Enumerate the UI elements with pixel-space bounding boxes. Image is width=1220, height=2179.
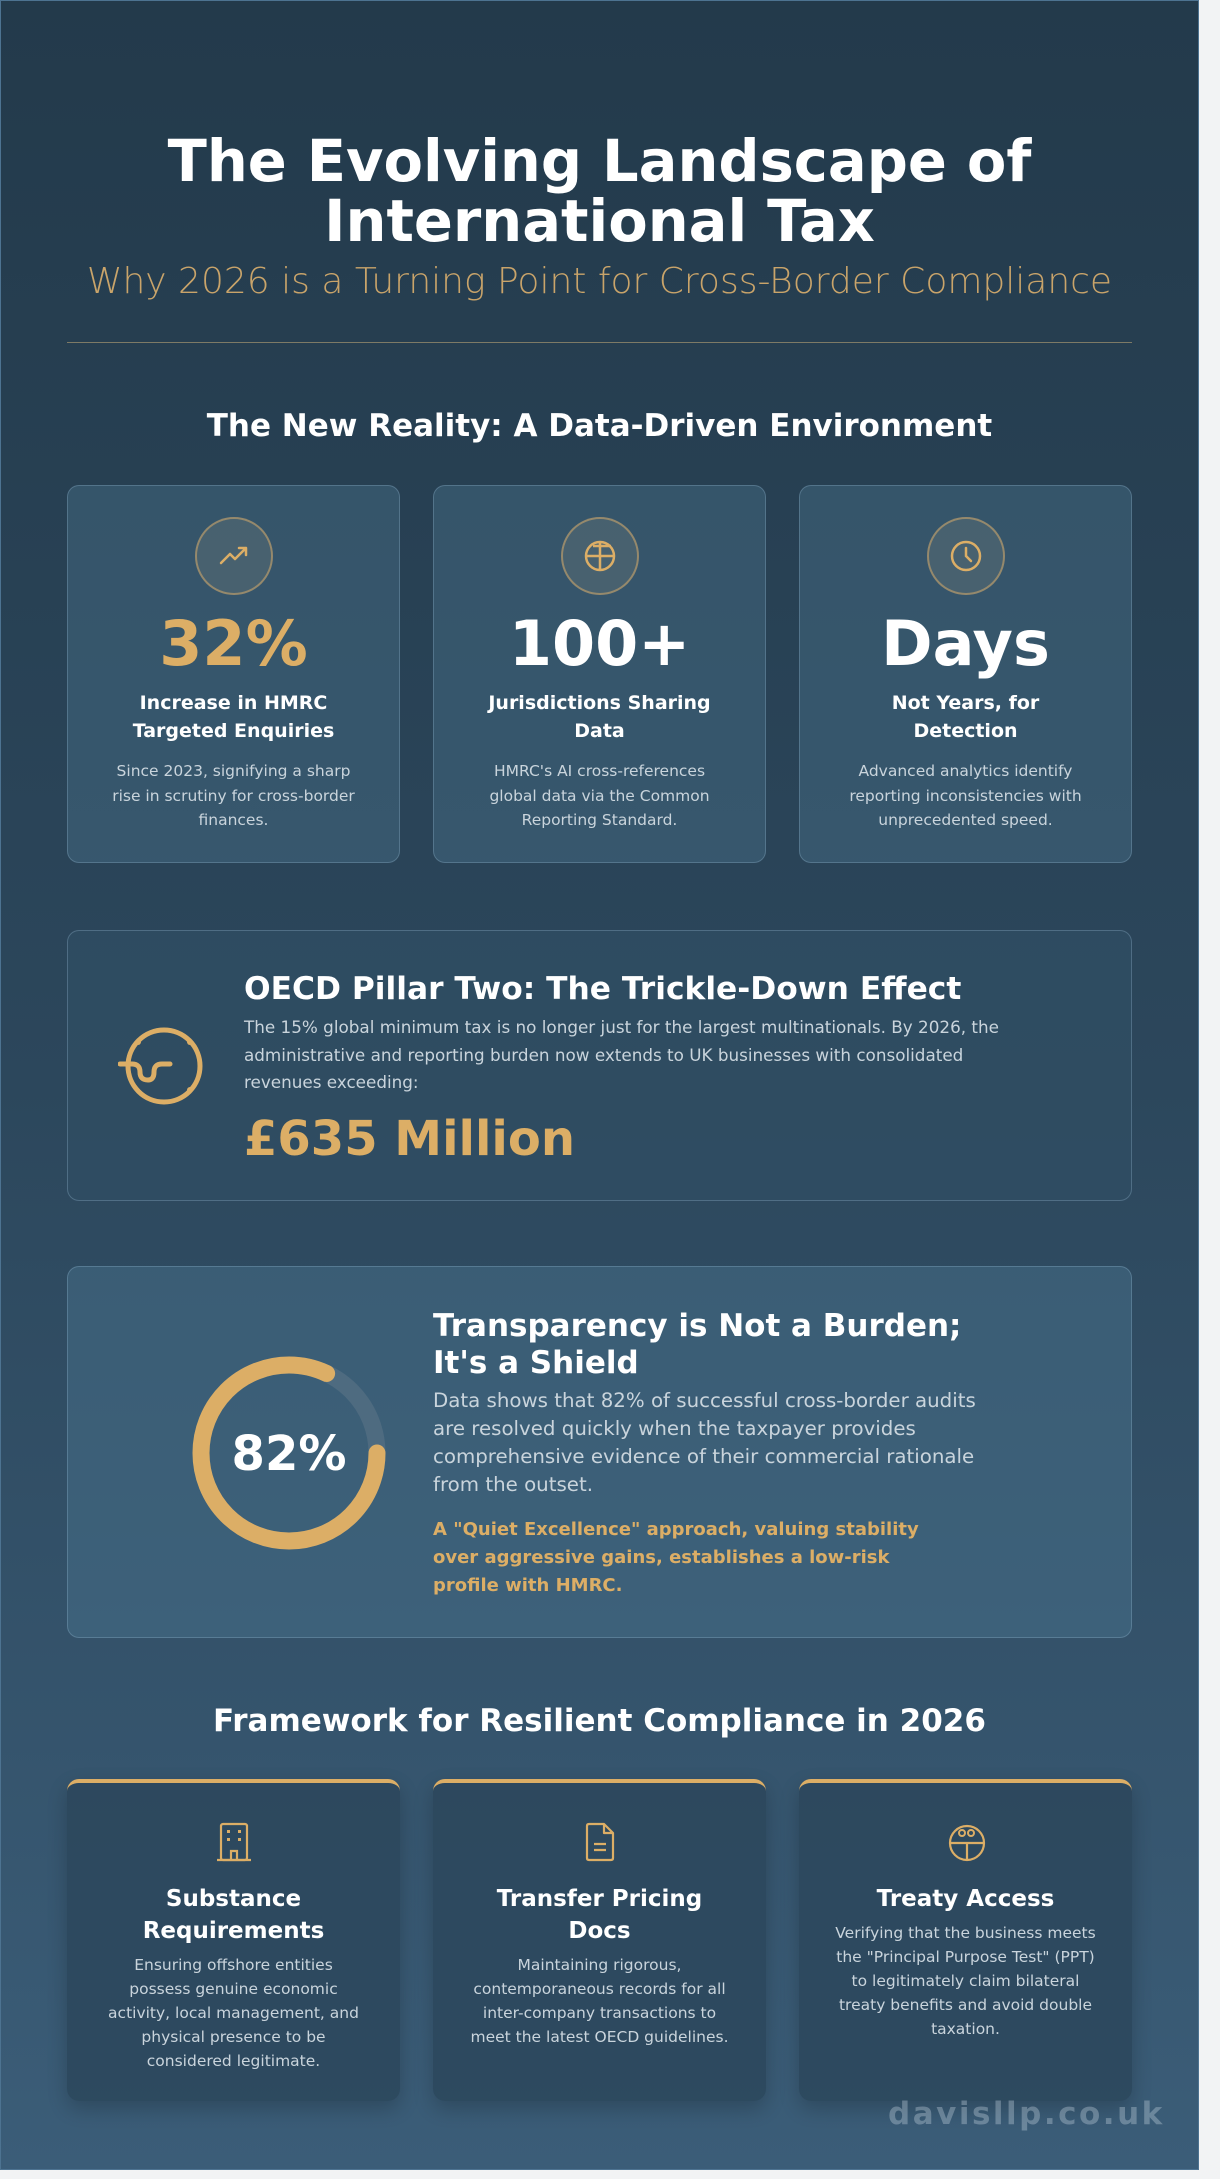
- icon: globe: [561, 517, 639, 595]
- heading: OECD Pillar Two: The Trickle-Down Effect: [244, 971, 961, 1007]
- stat: 635 million: £635 Million: [244, 1111, 575, 1167]
- stat: 100+: [509, 607, 690, 680]
- label: [487, 692, 711, 742]
- label: Data: [574, 720, 625, 742]
- title: Docs: [568, 1918, 631, 1944]
- icon: building: [217, 1822, 251, 1862]
- title: [496, 1886, 702, 1944]
- card: treaty access: [799, 1779, 1132, 2101]
- stat: 32%: [159, 607, 308, 680]
- desc: Maintaining rigorous, contemporaneous records for all inter-company transactions to meet the latest OECD guidelines.: [470, 1956, 729, 2046]
- heading: new reality: The New Reality: A Data-Driven Environment: [207, 408, 992, 444]
- icon: trend up: [195, 517, 273, 595]
- callout: A "Quiet Excellence" approach, valuing stability over aggressive gains, establishes a low-risk profile with HMRC.: [433, 1519, 919, 1596]
- icon: document: [586, 1822, 614, 1862]
- icon: clock: [927, 517, 1005, 595]
- card: 32%: [67, 485, 400, 863]
- title: Requirements: [143, 1918, 324, 1944]
- stat: Days: [881, 607, 1050, 680]
- label: Not Years, for: [892, 692, 1039, 714]
- icon: globe handshake: [948, 1824, 986, 1862]
- title: Transfer Pricing: [497, 1886, 702, 1912]
- donut chart 82%: [192, 1356, 386, 1550]
- label: [892, 692, 1040, 742]
- title: International Tax: [324, 188, 875, 255]
- title: The Evolving Landscape of: [168, 128, 1031, 195]
- desc: Since 2023, signifying a sharp rise in scrutiny for cross-border finances.: [112, 762, 355, 829]
- heading: It's a Shield: [433, 1345, 639, 1381]
- title: Treaty Access: [877, 1886, 1054, 1912]
- title: [168, 128, 1032, 255]
- heading: [433, 1308, 961, 1381]
- desc: Ensuring offshore entities possess genuine economic activity, local management, and physical presence to be considered legitimate.: [108, 1956, 359, 2070]
- label: Increase in HMRC: [140, 692, 327, 714]
- subtitle: Why 2026 is a Turning Point for Cross-Border Compliance: [87, 261, 1112, 302]
- desc: Advanced analytics identify reporting inconsistencies with unprecedented speed.: [849, 762, 1082, 829]
- card: days: [799, 485, 1132, 863]
- label: Jurisdictions Sharing: [488, 692, 711, 714]
- desc: HMRC's AI cross-references global data via the Common Reporting Standard.: [489, 762, 710, 829]
- label: Detection: [913, 720, 1018, 742]
- title: [143, 1886, 324, 1944]
- heading: Transparency is Not a Burden;: [433, 1308, 961, 1344]
- title: Substance: [166, 1886, 301, 1912]
- label: Targeted Enquiries: [133, 720, 334, 742]
- panel: OECD pillar two: [67, 930, 1132, 1201]
- icon: pillar: [118, 1028, 202, 1104]
- card: substance: [67, 1779, 400, 2101]
- label: [132, 692, 334, 742]
- body text: Data shows that 82% of successful cross-border audits are resolved quickly when the taxpayer provides comprehensive evidence of their commercial rationale from the outset.: [433, 1389, 976, 1496]
- body text: The 15% global minimum tax is no longer just for the largest multinationals. By 2026, the administrative and reporting burden now extends to UK businesses with consolidated revenues exceeding:: [244, 1017, 999, 1092]
- panel: transparency: [67, 1266, 1132, 1638]
- card: 100+: [433, 485, 766, 863]
- desc: Verifying that the business meets the "Principal Purpose Test" (PPT) to legitimately claim bilateral treaty benefits and avoid double taxation.: [835, 1924, 1096, 2038]
- heading: framework: Framework for Resilient Compliance in 2026: [213, 1703, 986, 1739]
- watermark: davisllp.co.uk: [888, 2096, 1165, 2132]
- donut chart 82%: 82%: [232, 1426, 346, 1482]
- card: transfer pricing: [433, 1779, 766, 2101]
